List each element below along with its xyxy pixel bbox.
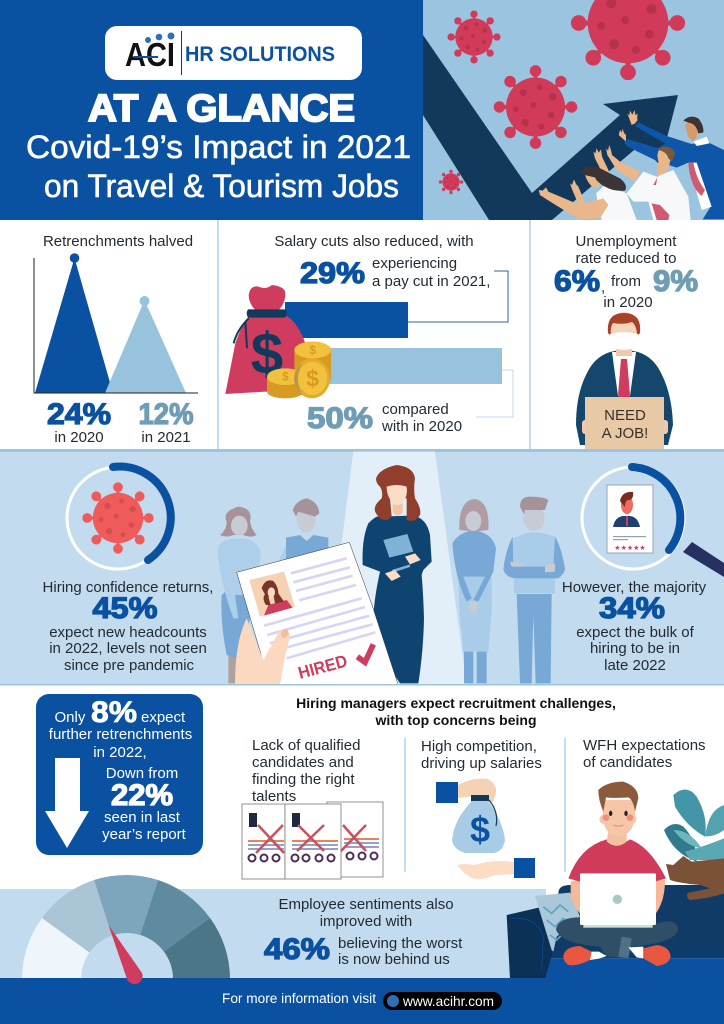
- icon: masked man with sign: [576, 312, 673, 449]
- stat: 12% in 2021: 12%: [138, 398, 194, 431]
- text: employee sentiment: 46%: [264, 933, 330, 966]
- heading: Salary cuts also reduced, with: [274, 233, 474, 250]
- stat: 24% in 2020: in 2020: [54, 429, 104, 446]
- icon: money bag exchanged between hands: $: [470, 809, 490, 850]
- stat: 50%: 50%: [307, 402, 373, 435]
- header panel: [0, 0, 724, 220]
- cat: [666, 856, 724, 900]
- icon: money bag with coins: $: [251, 321, 283, 386]
- illustration: man with laptop on sofa: [507, 782, 724, 979]
- heading: recruitment challenges: with top concerns being: [374, 712, 537, 728]
- callout: further retrenchments: 8%: [91, 696, 137, 729]
- plant: [664, 790, 724, 862]
- icon: money bag with coins: $: [282, 370, 289, 384]
- callout: further retrenchments: Only: [54, 709, 86, 726]
- text: employee sentiment: is now behind us: [338, 951, 450, 968]
- text: majority hiring late 2022: 34%: [599, 592, 665, 625]
- text: concern 1: Lack of qualified: [252, 737, 360, 754]
- people reaching for arrow: [539, 110, 724, 220]
- text: majority hiring late 2022: late 2022: [604, 657, 666, 674]
- text: employee sentiment: improved with: [320, 913, 412, 930]
- website pill: [383, 992, 502, 1010]
- panel: employee sentiment band: [0, 875, 546, 979]
- callout: further retrenchments: year’s report: [102, 826, 187, 843]
- sofa: [507, 885, 724, 979]
- icon: rejected resumes: [242, 802, 383, 879]
- text: hiring confidence: in 2022, levels not seen: [49, 640, 207, 657]
- gauge needle: [108, 925, 143, 984]
- background person: man left: [278, 498, 328, 568]
- panel: unemployment: [554, 233, 698, 449]
- heading: Unemployment: [576, 233, 677, 250]
- text: majority hiring late 2022: However, the majority: [562, 579, 707, 596]
- text: hiring confidence: since pre pandemic: [64, 657, 195, 674]
- title: on Travel & Tourism Jobs: [44, 168, 399, 204]
- stat: 29%: 29%: [300, 257, 365, 290]
- bar: 2021 pay cuts: [285, 302, 408, 338]
- heading: recruitment challenges: [296, 695, 616, 728]
- footer: For more information visit: [222, 991, 376, 1006]
- title: [26, 88, 411, 204]
- stat: 6% from 9% in 2020: ,: [601, 279, 605, 296]
- website pill: www.acihr.com: [402, 993, 494, 1009]
- spotlight: [323, 452, 467, 685]
- text: concern 2: driving up salaries: [421, 755, 542, 772]
- panel: challenges band: [0, 684, 724, 890]
- text: hiring confidence: 45%: [92, 592, 158, 625]
- icon: money bag with coins: $: [306, 366, 319, 392]
- header illustration background: [423, 0, 724, 220]
- text: concern 1: talents: [252, 788, 296, 805]
- text: majority hiring late 2022: hiring to be in: [590, 640, 680, 657]
- title: AT A GLANCE: [88, 88, 355, 130]
- panel: salary cuts: [225, 233, 513, 435]
- heading: [576, 233, 677, 267]
- text: concern 3: WFH expectations: [583, 737, 706, 754]
- heading: Retrenchments halved: [43, 233, 193, 250]
- icon: masked man with sign: NEED: [604, 407, 646, 424]
- title: Covid-19’s Impact in 2021: [26, 129, 411, 165]
- logo: HR SOLUTIONS: [185, 43, 335, 66]
- stat: 24% in 2020: [47, 398, 111, 446]
- logo: ACI: [125, 36, 175, 73]
- text: concern 1: finding the right: [252, 771, 355, 788]
- text: concern 2: [421, 738, 542, 772]
- resume: hired: HIRED: [296, 651, 349, 683]
- text: employee sentiment: believing the worst: [338, 935, 463, 952]
- main figure: woman in navy dress: [363, 465, 432, 683]
- text: employee sentiment: [264, 896, 463, 968]
- background person: woman right: [452, 499, 496, 683]
- stat: 29%: [300, 255, 490, 290]
- icon: money bag with coins: $: [309, 343, 316, 357]
- icon: magnifying glass with resume: [582, 467, 724, 577]
- panel: white statistics band: [0, 220, 724, 452]
- icon: magnifying glass with resume: ★★★★★: [614, 544, 646, 552]
- footer: [0, 925, 724, 1024]
- text: majority hiring late 2022: expect the bulk of: [576, 624, 695, 641]
- text: hiring confidence: Hiring confidence returns,: [43, 579, 213, 596]
- chart: sentiment gauge: [22, 875, 230, 979]
- icon: masked man with sign: A JOB!: [602, 425, 648, 442]
- callout: further retrenchments: Down from: [106, 765, 178, 782]
- resume: hired: [237, 542, 399, 688]
- stat: 29%: a pay cut in 2021,: [372, 273, 490, 290]
- arrow: rising trend: [423, 35, 678, 220]
- callout: further retrenchments: 22%: [111, 779, 173, 812]
- stat: 24% in 2020: 24%: [47, 398, 111, 431]
- text: concern 2: High competition,: [421, 738, 537, 755]
- icon: virus: [82, 482, 154, 554]
- text: concern 1: [252, 737, 360, 805]
- text: employee sentiment: Employee sentiments also: [278, 896, 454, 913]
- callout: further retrenchments: seen in last: [104, 809, 181, 826]
- ring: hiring confidence gauge: [67, 467, 171, 569]
- callout: further retrenchments: expect: [141, 709, 186, 726]
- cushion: [535, 893, 580, 952]
- callout: further retrenchments: [36, 694, 203, 855]
- hiring illustration: [217, 452, 565, 688]
- panel: hiring band: [0, 452, 724, 688]
- text: hiring confidence: expect new headcounts: [49, 624, 207, 641]
- icon: viruses: [439, 0, 685, 194]
- stat: 6% from 9% in 2020: in 2020: [603, 294, 653, 311]
- text: majority hiring late 2022: [562, 579, 707, 674]
- stat: 50%: [307, 401, 462, 435]
- text: concern 3: of candidates: [583, 754, 672, 771]
- stat: 12% in 2021: [138, 398, 194, 446]
- logo: [105, 26, 362, 80]
- background person: woman left: [217, 507, 261, 683]
- icon: money bag exchanged between hands: [436, 779, 535, 879]
- man: [556, 782, 678, 966]
- heading: rate reduced to: [576, 250, 676, 267]
- stat: 6% from 9% in 2020: from: [611, 273, 641, 290]
- stat: 6% from 9% in 2020: 6%: [554, 265, 600, 298]
- stat: 50%: with in 2020: [381, 418, 462, 435]
- text: hiring confidence: [43, 579, 213, 674]
- icon: hand holding resume: [235, 618, 290, 685]
- callout: further retrenchments: in 2022,: [93, 744, 147, 761]
- bar: 2020 pay cuts: [325, 348, 502, 384]
- stat: 12% in 2021: in 2021: [141, 429, 191, 446]
- arrow: down: [45, 758, 89, 848]
- text: concern 3: [583, 737, 706, 771]
- stat: 6% from 9% in 2020: [554, 265, 698, 311]
- header background: [0, 0, 423, 220]
- stat: 29%: experiencing: [372, 255, 457, 272]
- heading: recruitment challenges: Hiring managers expect recruitment challenges,: [296, 695, 616, 711]
- icon: money bag with coins: [225, 285, 331, 398]
- text: concern 1: candidates and: [252, 754, 354, 771]
- chart: retrenchment triangles: [34, 253, 198, 393]
- stat: 50%: compared: [382, 401, 449, 418]
- panel: retrenchments: [34, 233, 198, 446]
- callout: further retrenchments: further retrenchments: [49, 726, 192, 743]
- background person: man right: [503, 497, 565, 683]
- stat: 6% from 9% in 2020: 9%: [653, 265, 698, 298]
